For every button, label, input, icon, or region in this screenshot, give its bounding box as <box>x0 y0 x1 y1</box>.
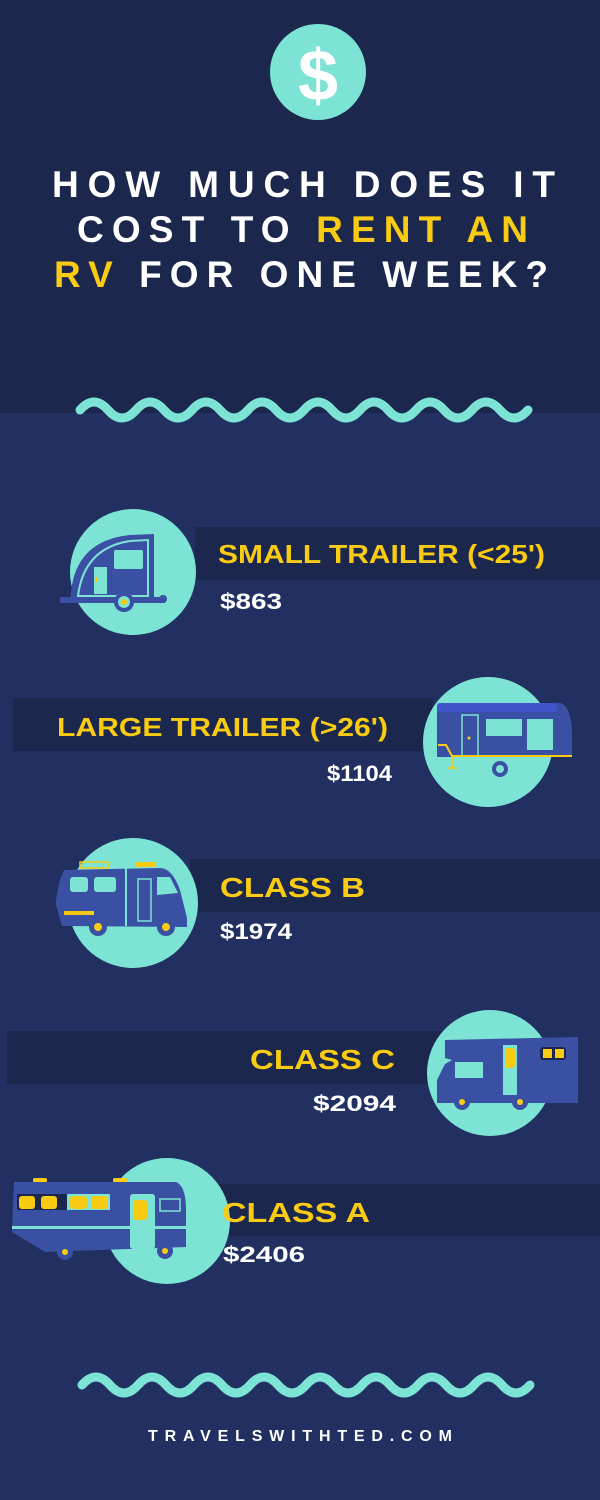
icon: large trailer <box>423 677 572 807</box>
title: HOW MUCH DOES IT <box>52 164 555 205</box>
price: small trailer: $863 <box>220 589 282 614</box>
icon: class C motorhome <box>427 1010 578 1136</box>
footer: website: TRAVELSWITHTED.COM <box>148 1428 452 1445</box>
price: large trailer: $1104 <box>327 761 393 786</box>
price: class B: $1974 <box>220 919 293 944</box>
label: class C: CLASS C <box>250 1044 395 1075</box>
wave divider bottom <box>82 1377 530 1393</box>
icon: class B van <box>56 838 198 968</box>
header panel <box>0 0 600 413</box>
label: class B: CLASS B <box>220 872 365 903</box>
title: RV FOR ONE WEEK? <box>54 254 548 295</box>
price: class A: $2406 <box>223 1242 305 1267</box>
row: class B <box>56 838 600 968</box>
icon: class A motorhome <box>12 1158 230 1284</box>
icon: dollar coin: $ <box>298 36 338 116</box>
row: class C <box>7 1010 578 1136</box>
row: small trailer <box>60 509 600 635</box>
label: class A: CLASS A <box>222 1197 370 1228</box>
wave divider top <box>80 402 528 418</box>
label: large trailer: LARGE TRAILER (>26') <box>57 712 388 742</box>
icon: small trailer <box>60 509 196 635</box>
price: class C: $2094 <box>313 1091 397 1116</box>
title <box>52 164 555 295</box>
row: class A <box>12 1158 600 1284</box>
icon: dollar coin <box>270 24 366 120</box>
row: large trailer <box>13 677 572 807</box>
title: COST TO RENT AN <box>77 209 528 250</box>
label: small trailer: SMALL TRAILER (<25') <box>218 539 545 569</box>
